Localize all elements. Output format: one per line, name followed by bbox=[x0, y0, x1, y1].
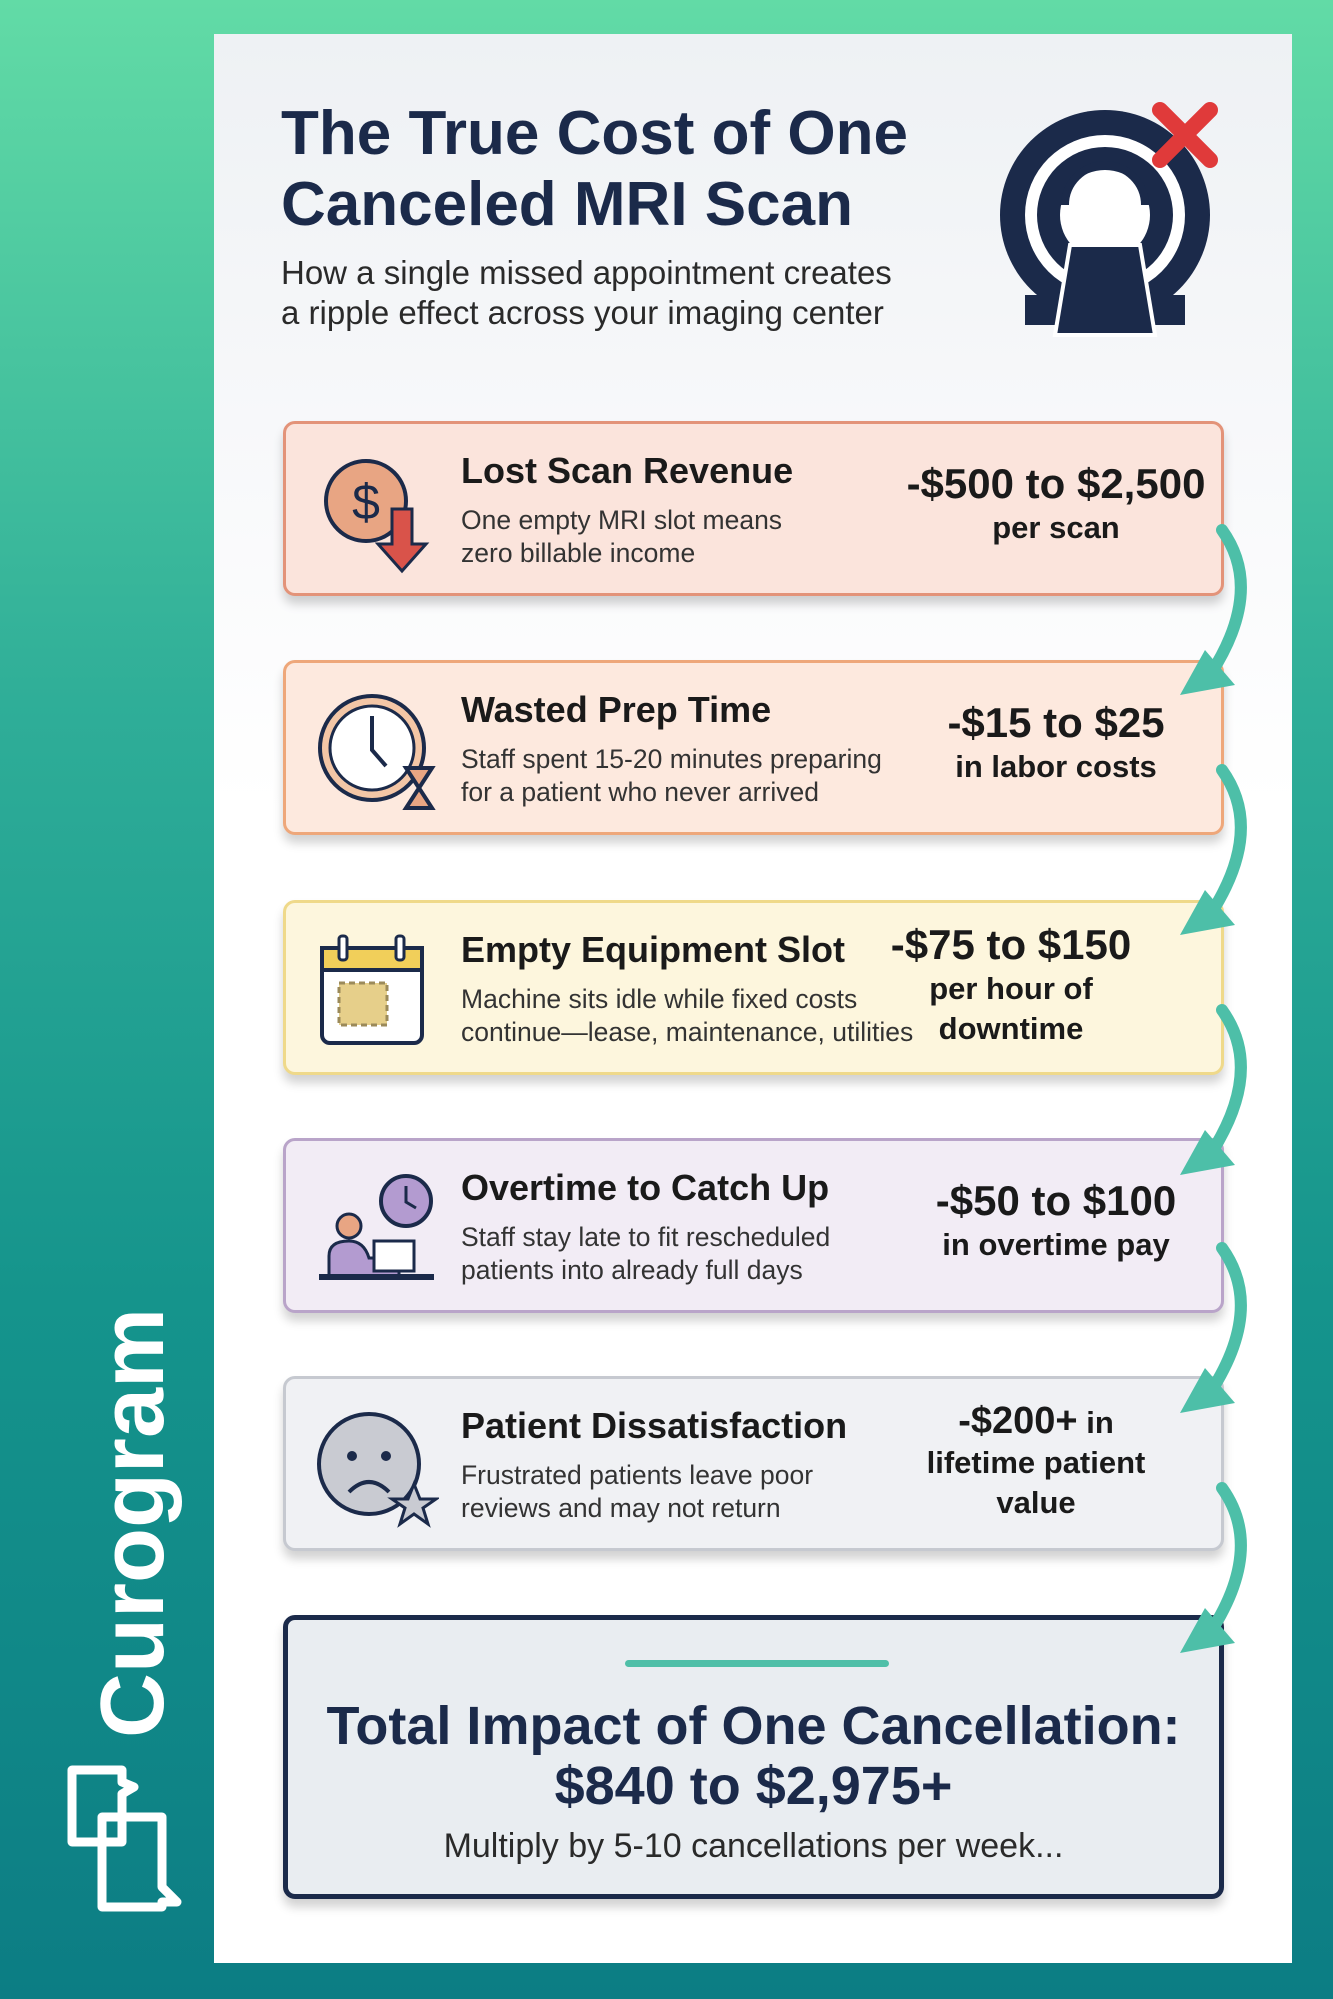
card: patient dissatisfaction: lifetime patient bbox=[927, 1445, 1145, 1480]
icon: sad face with star bbox=[317, 1412, 439, 1528]
icon: dollar down bbox=[324, 459, 430, 574]
icon: dollar down: $ bbox=[352, 474, 380, 530]
card: wasted prep time bbox=[283, 660, 1224, 835]
card: patient dissatisfaction: reviews and may not return bbox=[461, 1493, 781, 1523]
arrows: teal curved connectors bbox=[1180, 524, 1247, 1653]
card: empty equipment slot: per hour of bbox=[929, 971, 1093, 1006]
card: empty equipment slot: -$75 to $150 bbox=[891, 921, 1131, 968]
card: overtime to catch up bbox=[283, 1138, 1224, 1313]
card: overtime to catch up: patients into already full days bbox=[461, 1255, 803, 1285]
title: The True Cost of One bbox=[281, 99, 908, 168]
card: lost scan revenue: -$500 to $2,500 bbox=[907, 460, 1205, 507]
title bbox=[281, 99, 908, 239]
card: patient dissatisfaction: value bbox=[996, 1485, 1076, 1520]
title: Canceled MRI Scan bbox=[281, 170, 853, 239]
icon: clock hourglass bbox=[318, 694, 436, 810]
card: overtime to catch up: -$50 to $100 bbox=[936, 1177, 1176, 1224]
card: wasted prep time: in labor costs bbox=[955, 749, 1157, 784]
card: empty equipment slot: Empty Equipment Slot bbox=[461, 929, 845, 970]
card: lost scan revenue: One empty MRI slot means bbox=[461, 505, 782, 535]
card: patient dissatisfaction: Frustrated patients leave poor bbox=[461, 1460, 813, 1490]
card: wasted prep time: -$15 to $25 bbox=[947, 699, 1165, 746]
card: empty equipment slot: Machine sits idle while fixed costs bbox=[461, 984, 857, 1014]
card: patient dissatisfaction: -$200+ in bbox=[958, 1400, 1114, 1442]
icon: staff at desk with clock bbox=[319, 1174, 434, 1280]
card: empty equipment slot: downtime bbox=[939, 1011, 1083, 1046]
card: overtime to catch up: in overtime pay bbox=[942, 1227, 1170, 1262]
card: empty equipment slot bbox=[283, 900, 1224, 1075]
card: wasted prep time: Wasted Prep Time bbox=[461, 689, 771, 730]
card: patient dissatisfaction: Patient Dissatisfaction bbox=[461, 1405, 847, 1446]
card: overtime to catch up: Overtime to Catch Up bbox=[461, 1167, 829, 1208]
card: lost scan revenue: per scan bbox=[992, 510, 1120, 545]
card: lost scan revenue: Lost Scan Revenue bbox=[461, 450, 793, 491]
icon: Curogram logo bbox=[68, 1766, 182, 1912]
subtitle: How a single missed appointment creates bbox=[281, 254, 892, 291]
subtitle: a ripple effect across your imaging center bbox=[281, 294, 884, 331]
card: overtime to catch up: Staff stay late to fit rescheduled bbox=[461, 1222, 830, 1252]
icon: MRI scanner with X bbox=[1000, 102, 1218, 337]
total title: $840 to $2,975+ bbox=[555, 1756, 952, 1816]
total title: Total Impact of One Cancellation: bbox=[326, 1696, 1181, 1756]
card: lost scan revenue: zero billable income bbox=[461, 538, 695, 568]
card: wasted prep time: Staff spent 15-20 minutes preparing bbox=[461, 744, 882, 774]
card: empty equipment slot: continue—lease, maintenance, utilities bbox=[461, 1017, 913, 1047]
card: lost scan revenue bbox=[283, 421, 1224, 596]
brand: Curogram vertical: Curogram bbox=[83, 1308, 183, 1738]
white panel bbox=[214, 34, 1292, 1963]
total title bbox=[326, 1696, 1181, 1816]
card: wasted prep time: for a patient who never arrived bbox=[461, 777, 819, 807]
card: patient dissatisfaction bbox=[283, 1376, 1224, 1551]
total impact box bbox=[283, 1615, 1224, 1899]
subtitle bbox=[281, 254, 892, 331]
total note: Multiply by 5-10 cancellations per week... bbox=[444, 1827, 1063, 1865]
teal accent line bbox=[625, 1660, 889, 1667]
icon: calendar bbox=[320, 934, 424, 1045]
